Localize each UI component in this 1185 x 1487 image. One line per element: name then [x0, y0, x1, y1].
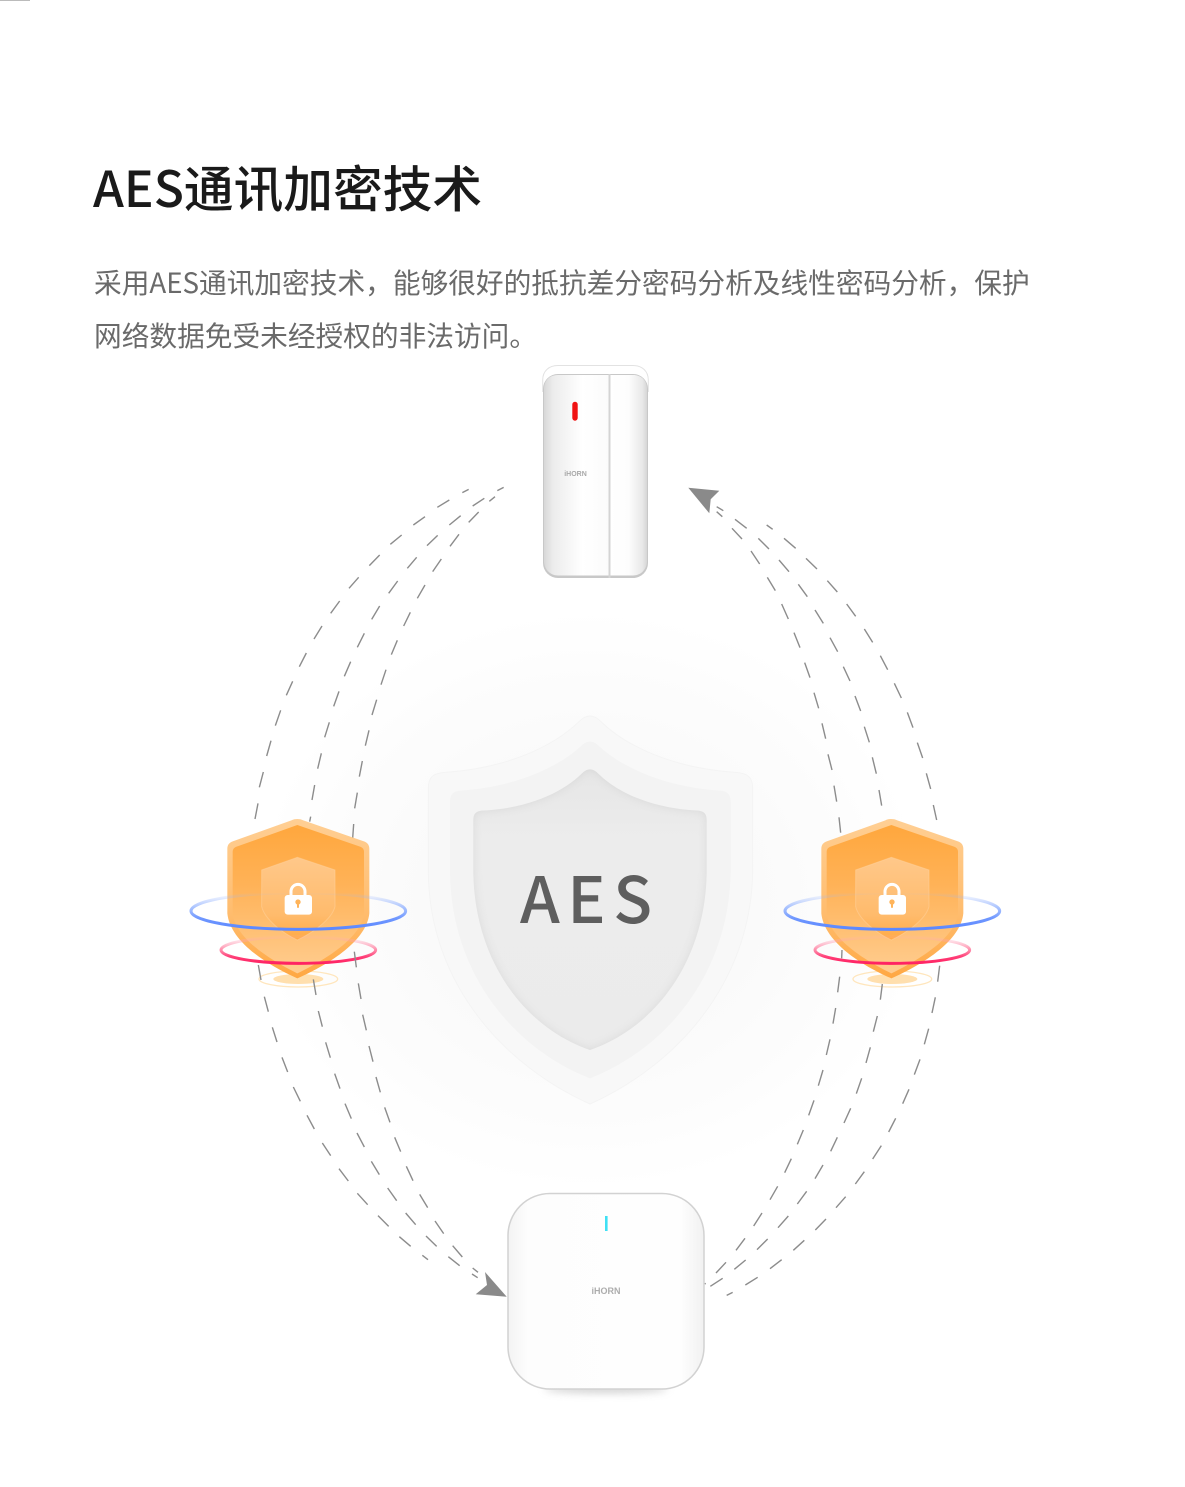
cyan LED — [605, 1216, 608, 1231]
shield middle layer — [450, 742, 731, 1078]
arrow: toward sensor — [688, 488, 719, 513]
dashed arcs: lower right, hub to right shield — [705, 950, 940, 1295]
shield body — [227, 819, 369, 978]
AES label: AES — [520, 850, 660, 942]
right lock shield with rings — [785, 819, 1000, 987]
shield inner layer — [473, 769, 707, 1050]
arrow: toward hub — [476, 1272, 507, 1297]
dashed arcs: upper left, sensor to left shield — [255, 487, 504, 838]
sensor back plate — [543, 366, 648, 392]
door sensor device — [543, 366, 648, 578]
inner shield — [262, 857, 335, 940]
sensor front body — [543, 374, 648, 578]
pink ring — [221, 937, 376, 963]
shield outer layer — [428, 716, 753, 1104]
dashed arcs: lower left, left shield to hub — [258, 952, 478, 1278]
central AES shield — [428, 716, 753, 1104]
description text — [94, 261, 1030, 354]
description text: 采用AES通讯加密技术，能够很好的抵抗差分密码分析及线性密码分析，保护 — [94, 261, 1030, 301]
center shield background glow — [255, 610, 925, 1190]
left lock shield with rings — [191, 819, 406, 987]
sensor brand label: iHORN — [564, 471, 587, 478]
dashed arcs: upper right, right shield to sensor — [717, 507, 937, 833]
hub brand label: iHORN — [592, 1286, 620, 1296]
description text: 网络数据免受未经授权的非法访问。 — [94, 314, 537, 354]
lock icon — [285, 884, 312, 915]
base ripple — [259, 971, 338, 987]
hub device — [508, 1194, 704, 1393]
blue ring — [191, 893, 406, 929]
title: AES通讯加密技术 — [93, 150, 482, 222]
red LED — [572, 402, 578, 421]
